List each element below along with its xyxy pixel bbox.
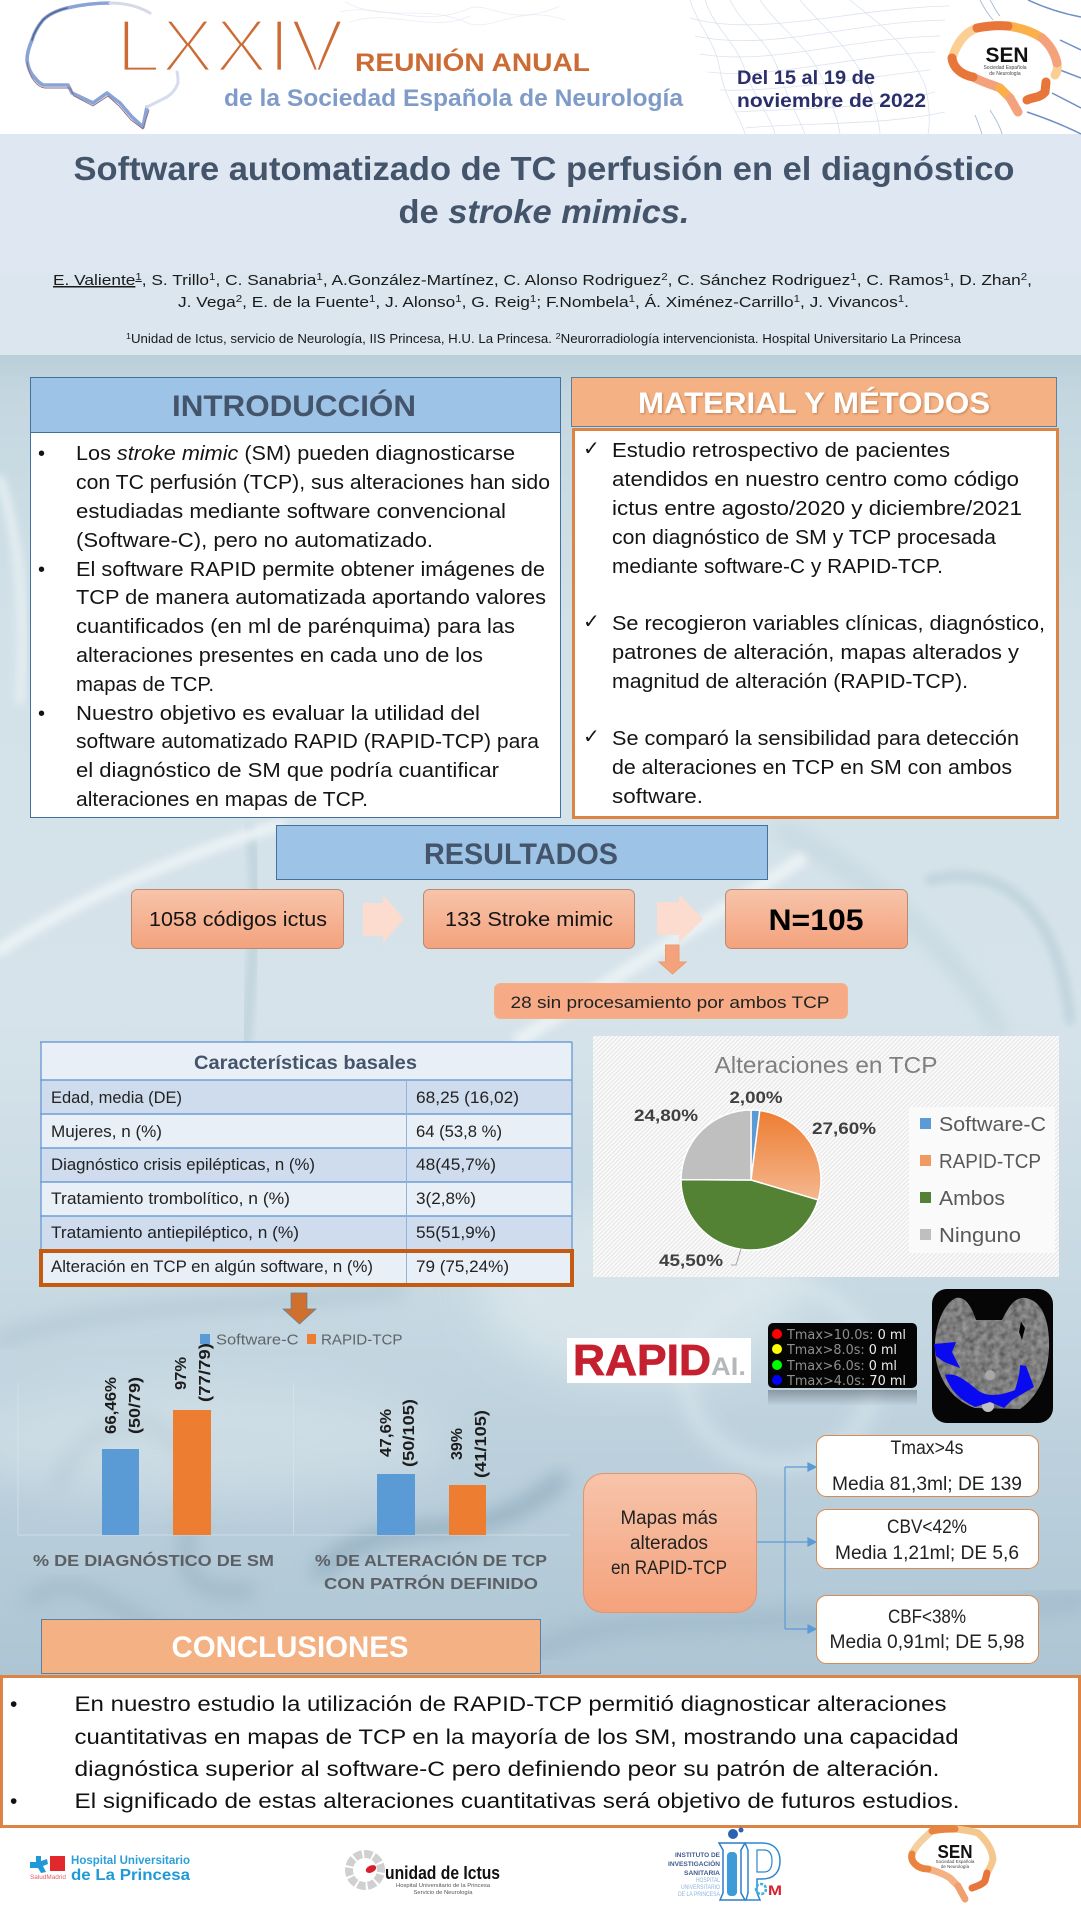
chart legend	[200, 1332, 402, 1348]
text block: métodos: software.	[612, 786, 703, 808]
text block: introducción: TCP de manera automatizada aportando valores	[76, 587, 546, 609]
panel: conclusiones: •	[10, 1693, 17, 1716]
text block: métodos	[574, 430, 1058, 818]
text block: introducción: mapas de TCP.	[76, 674, 214, 696]
legend: Tmax volumes: Tmax>4.0s: 70 ml	[786, 1374, 906, 1389]
logo: SEN: de Neurología	[989, 71, 1021, 77]
authors: 1	[369, 294, 376, 305]
subtitle: Sociedad: de la Sociedad Española de Neurología	[224, 85, 684, 112]
logo: SEN bottom: SEN	[938, 1842, 972, 1862]
legend: Tmax volumes: Tmax>10.0s: 0 ml	[786, 1328, 906, 1343]
text block: introducción: •	[38, 703, 45, 725]
pie labels	[634, 1088, 876, 1270]
box: mapas más alterados: alterados	[630, 1533, 708, 1554]
logo: instituto de investigación sanitaria: DE LA PRINCESA	[678, 1891, 721, 1898]
box: CBF: Media 0,91ml; DE 5,98	[830, 1632, 1024, 1653]
legend: Tmax volumes: Tmax>6.0s: 0 ml	[786, 1359, 897, 1374]
text block: introducción: alteraciones en mapas de TCP.	[76, 789, 368, 811]
heading: material y métodos: MATERIAL Y MÉTODOS	[638, 386, 990, 420]
background: blurred neuron texture	[0, 355, 1081, 1680]
authors: , C. Sánchez Rodriguez	[668, 272, 850, 289]
heading: conclusiones: CONCLUSIONES	[172, 1631, 408, 1664]
bar value labels: 66,46%	[103, 1377, 120, 1434]
bar value labels: 97%	[173, 1357, 190, 1390]
logo: unidad de ictus: Hospital Universitario de la Princesa	[396, 1883, 491, 1889]
text block: métodos: con diagnóstico de SM y TCP procesada	[612, 527, 997, 549]
logo: unidad de ictus: unidad de Ictus	[385, 1863, 500, 1883]
authors: , J. Vivancos	[800, 294, 898, 311]
logo: SEN: Sociedad Española	[983, 65, 1027, 71]
bar value labels: (50/79)	[127, 1377, 144, 1434]
logo: instituto de investigación sanitaria: INSTITUTO DE	[675, 1852, 721, 1859]
box: 1058 códigos ictus	[132, 890, 344, 948]
affiliations: Unidad de Ictus, servicio de Neurología, IIS Princesa, H.U. La Princesa.	[131, 332, 556, 346]
pie labels: 2,00%	[730, 1088, 782, 1107]
table: características basales	[40, 1042, 572, 1285]
authors: 2	[661, 272, 668, 283]
title: de stroke mimics.	[398, 193, 690, 230]
authors: 1	[455, 294, 462, 305]
text block: introducción: •	[38, 443, 45, 465]
logo: instituto de investigación sanitaria: M	[768, 1882, 782, 1898]
text block: introducción: con TC perfusión (TCP), sus alteraciones han sido	[76, 472, 550, 494]
text block: métodos: ✓	[583, 726, 600, 748]
heading: material y métodos	[572, 378, 1056, 426]
bar value labels	[103, 1343, 490, 1478]
heading: resultados: RESULTADOS	[424, 838, 618, 871]
authors: J. Vega	[178, 294, 228, 311]
title band	[0, 134, 1081, 355]
logo: SEN bottom: de Neurología	[941, 1864, 970, 1869]
table rows: 79 (75,24%)	[416, 1258, 509, 1276]
text block: introducción: estudiadas mediante software convencional	[76, 501, 506, 523]
heading: conclusiones	[42, 1620, 540, 1674]
header banner	[0, 0, 1081, 134]
text block: introducción: alteraciones presentes en cada uno de los	[76, 645, 483, 667]
heading: introducción	[30, 378, 560, 432]
authors: ,	[1027, 272, 1032, 289]
authors: 1	[943, 272, 950, 283]
bars	[102, 1410, 486, 1535]
box: 28 sin procesamiento: 28 sin procesamiento por ambos TCP	[510, 994, 830, 1012]
legend	[909, 1107, 1055, 1253]
text block: introducción	[30, 432, 560, 818]
icon: brain outline	[27, 3, 178, 129]
panel: conclusiones: •	[10, 1790, 17, 1813]
subtitle: Reunión Anual: REUNIÓN ANUAL	[355, 47, 590, 77]
flow: mapas más alterados	[584, 1436, 1038, 1664]
logo: RapidAI: AI.	[711, 1353, 746, 1381]
authors: 1	[629, 294, 636, 305]
text block: métodos: Se recogieron variables clínicas, diagnóstico,	[612, 613, 1045, 635]
category labels	[33, 1551, 547, 1593]
text block: métodos: magnitud de alteración (RAPID-TCP).	[612, 671, 968, 693]
box: CBV: CBV<42%	[887, 1517, 967, 1538]
panel: conclusiones: diagnóstica superior al software-C pero definiendo peor su patrón de alteración.	[74, 1758, 940, 1781]
text block: introducción: el diagnóstico de SM que podría cuantificar	[76, 760, 499, 782]
box: Tmax	[816, 1436, 1038, 1496]
bar value labels: (50/105)	[401, 1399, 418, 1467]
authors: ; F.Nombela	[536, 294, 629, 311]
box: 133 stroke mimic: 133 Stroke mimic	[445, 909, 613, 931]
box: mapas más alterados: Mapas más	[620, 1508, 718, 1529]
table rows	[51, 1089, 519, 1276]
authors: 1	[794, 294, 801, 305]
table rows: 68,25 (16,02)	[416, 1089, 519, 1107]
category labels: CON PATRÓN DEFINIDO	[324, 1574, 538, 1593]
table rows: Tratamiento trombolítico, n (%)	[51, 1190, 290, 1208]
heading: introducción: INTRODUCCIÓN	[172, 389, 416, 423]
box: CBF	[816, 1596, 1038, 1664]
logo: SEN	[952, 26, 1057, 112]
logo: SEN: SEN	[986, 44, 1028, 67]
table rows: 3(2,8%)	[416, 1190, 476, 1208]
chart title: Alteraciones en TCP	[714, 1052, 938, 1078]
authors	[53, 272, 1032, 311]
authors: , D. Zhan	[950, 272, 1021, 289]
text block: introducción: software automatizado RAPID (RAPID-TCP) para	[76, 731, 540, 753]
panel: pie chart alteraciones	[593, 1036, 1059, 1277]
box: Tmax: Media 81,3ml; DE 139	[832, 1474, 1022, 1495]
dates: Del 15 al 19 de	[737, 68, 875, 89]
image: perfusion map	[932, 1289, 1053, 1423]
text block: introducción: cuantificados (en ml de parénquima) para las	[76, 616, 515, 638]
dates	[737, 68, 926, 112]
box: 28 sin procesamiento	[494, 984, 848, 1018]
table rows: Edad, media (DE)	[51, 1089, 182, 1107]
legend: Tmax volumes	[768, 1323, 917, 1406]
authors: , E. de la Fuente	[242, 294, 369, 311]
table rows: Tratamiento antiepiléptico, n (%)	[51, 1224, 299, 1242]
decorative waves	[340, 0, 950, 134]
text block: introducción: El software RAPID permite obtener imágenes de	[76, 559, 545, 581]
logo: Hospital de La Princesa	[30, 1855, 190, 1884]
logo: Hospital de La Princesa: Hospital Universitario	[71, 1855, 190, 1867]
authors: 1	[316, 272, 323, 283]
arrow: down	[659, 945, 686, 974]
logo: Hospital de La Princesa: SaludMadrid	[30, 1874, 66, 1881]
arrow	[657, 894, 703, 943]
authors: 1	[209, 272, 216, 283]
authors: , C. Ramos	[857, 272, 943, 289]
box: 1058 códigos ictus: 1058 códigos ictus	[149, 909, 327, 931]
legend: RAPID-TCP	[939, 1151, 1041, 1173]
table rows: 64 (53,8 %)	[416, 1123, 502, 1141]
authors: 1	[530, 294, 537, 305]
panel: introducción	[30, 378, 560, 818]
dates: noviembre de 2022	[737, 91, 926, 112]
table heading: Características basales	[194, 1053, 417, 1074]
table rows: Diagnóstico crisis epilépticas, n (%)	[51, 1156, 315, 1174]
logo: instituto de investigación sanitaria	[668, 1828, 782, 1900]
legend: Tmax volumes: Tmax>8.0s: 0 ml	[786, 1343, 897, 1358]
heading: resultados	[276, 826, 768, 880]
table rows: Alteración en TCP en algún software, n (%)	[51, 1258, 373, 1276]
text block: introducción: Nuestro objetivo es evaluar la utilidad del	[76, 703, 480, 725]
authors: , C. Sanabria	[215, 272, 317, 289]
category labels: % DE ALTERACIÓN DE TCP	[315, 1551, 547, 1570]
box: CBV	[816, 1510, 1038, 1568]
panel: conclusiones: El significado de estas alteraciones cuantitativas será objetivo de futuros estudios.	[74, 1790, 960, 1813]
pie labels: 24,80%	[634, 1106, 698, 1125]
affiliations: 2	[556, 331, 561, 341]
authors: , G. Reig	[462, 294, 530, 311]
text block: métodos: de alteraciones en TCP en SM con ambos	[612, 757, 1012, 779]
text block: métodos: patrones de alteración, mapas alterados y	[612, 642, 1019, 664]
bar chart: sensibilidad	[18, 1332, 569, 1593]
arrow: table to bar chart	[283, 1293, 316, 1324]
table rows: 48(45,7%)	[416, 1156, 496, 1174]
authors: E. Valiente	[53, 272, 142, 289]
table rows: 55(51,9%)	[416, 1224, 496, 1242]
logo: instituto de investigación sanitaria: UNIVERSITARIO	[681, 1884, 720, 1891]
flow: patient selection	[132, 890, 908, 1018]
bar value labels: (77/79)	[197, 1343, 214, 1402]
LXXIV: LXXIV	[116, 4, 344, 88]
connectors	[757, 1463, 816, 1633]
text block: introducción: Los stroke mimic (SM) pueden diagnosticarse	[76, 443, 515, 465]
chart frame	[18, 1383, 569, 1535]
logo: RapidAI: RAPID	[573, 1336, 711, 1385]
authors: 1	[898, 294, 905, 305]
box: N=105	[726, 890, 908, 948]
legend: Software-C	[939, 1114, 1046, 1136]
chart legend: RAPID-TCP	[321, 1332, 402, 1348]
affiliations: 1	[126, 331, 131, 341]
box: Tmax: Tmax>4s	[890, 1438, 964, 1459]
authors: 2	[236, 294, 243, 305]
text block: métodos: Estudio retrospectivo de pacientes	[612, 440, 950, 462]
box: CBF: CBF<38%	[888, 1607, 966, 1628]
box: mapas más alterados	[584, 1474, 756, 1612]
table rows: Mujeres, n (%)	[51, 1123, 162, 1141]
logo: unidad de ictus	[344, 1849, 500, 1896]
logo: SEN bottom	[912, 1829, 993, 1899]
authors: 1	[850, 272, 857, 283]
text block: introducción: (Software-C), pero no automatizado.	[76, 530, 433, 552]
arrow	[363, 895, 404, 943]
authors: , S. Trillo	[142, 272, 209, 289]
text block: métodos: ✓	[583, 438, 600, 460]
logo: instituto de investigación sanitaria: INVESTIGACIÓN	[668, 1859, 720, 1868]
box: CBV: Media 1,21ml; DE 5,6	[835, 1543, 1019, 1564]
legend: Ninguno	[939, 1225, 1021, 1247]
authors: 2	[1021, 272, 1028, 283]
pie labels: 27,60%	[812, 1119, 876, 1138]
bar value labels: 47,6%	[378, 1409, 395, 1457]
category labels: % DE DIAGNÓSTICO DE SM	[33, 1551, 274, 1570]
text block: introducción: •	[38, 559, 45, 581]
highlight: alteración row	[41, 1251, 572, 1285]
panel: material y métodos	[572, 378, 1058, 818]
pie labels: 45,50%	[659, 1251, 723, 1270]
logo: instituto de investigación sanitaria: HOSPITAL	[696, 1877, 720, 1884]
text block: métodos: mediante software-C y RAPID-TCP.	[612, 556, 943, 578]
affiliations: Neurorradiología intervencionista. Hospital Universitario La Princesa	[561, 332, 961, 346]
box: 133 stroke mimic	[424, 890, 634, 948]
logo: instituto de investigación sanitaria: SANITARIA	[684, 1870, 720, 1877]
logo: SEN bottom: Sociedad Española	[936, 1859, 975, 1864]
text block: métodos: atendidos en nuestro centro como código	[612, 469, 1019, 491]
title	[74, 150, 1014, 230]
box: N=105: N=105	[768, 904, 864, 937]
logo: Hospital de La Princesa: de La Princesa	[71, 1867, 190, 1884]
authors: , Á. Ximénez-Carrillo	[635, 294, 794, 311]
authors: .	[904, 294, 909, 311]
title: Software automatizado de TC perfusión en el diagnóstico	[74, 150, 1014, 187]
bar value labels: 39%	[449, 1428, 466, 1460]
bar value labels: (41/105)	[473, 1410, 490, 1478]
logo: unidad de ictus: Servicio de Neurología	[414, 1890, 473, 1896]
pie	[681, 1110, 821, 1250]
text block: métodos: Se comparó la sensibilidad para detección	[612, 728, 1019, 750]
box: mapas más alterados: en RAPID-TCP	[611, 1558, 727, 1579]
text block: métodos: ✓	[583, 611, 600, 633]
panel: conclusiones: En nuestro estudio la utilización de RAPID-TCP permitió diagnosticar alteraciones	[74, 1693, 947, 1716]
authors: , J. Alonso	[375, 294, 455, 311]
authors: 1	[135, 272, 142, 283]
text block: métodos: ictus entre agosto/2020 y diciembre/2021	[612, 498, 1022, 520]
panel: conclusiones	[0, 1676, 1081, 1920]
legend: Ambos	[939, 1188, 1005, 1210]
panel: conclusiones: cuantitativas en mapas de TCP en la mayoría de los SM, mostrando una capacidad	[74, 1726, 958, 1749]
chart legend: Software-C	[216, 1332, 299, 1348]
authors: , A.González-Martínez, C. Alonso Rodriguez	[323, 272, 661, 289]
